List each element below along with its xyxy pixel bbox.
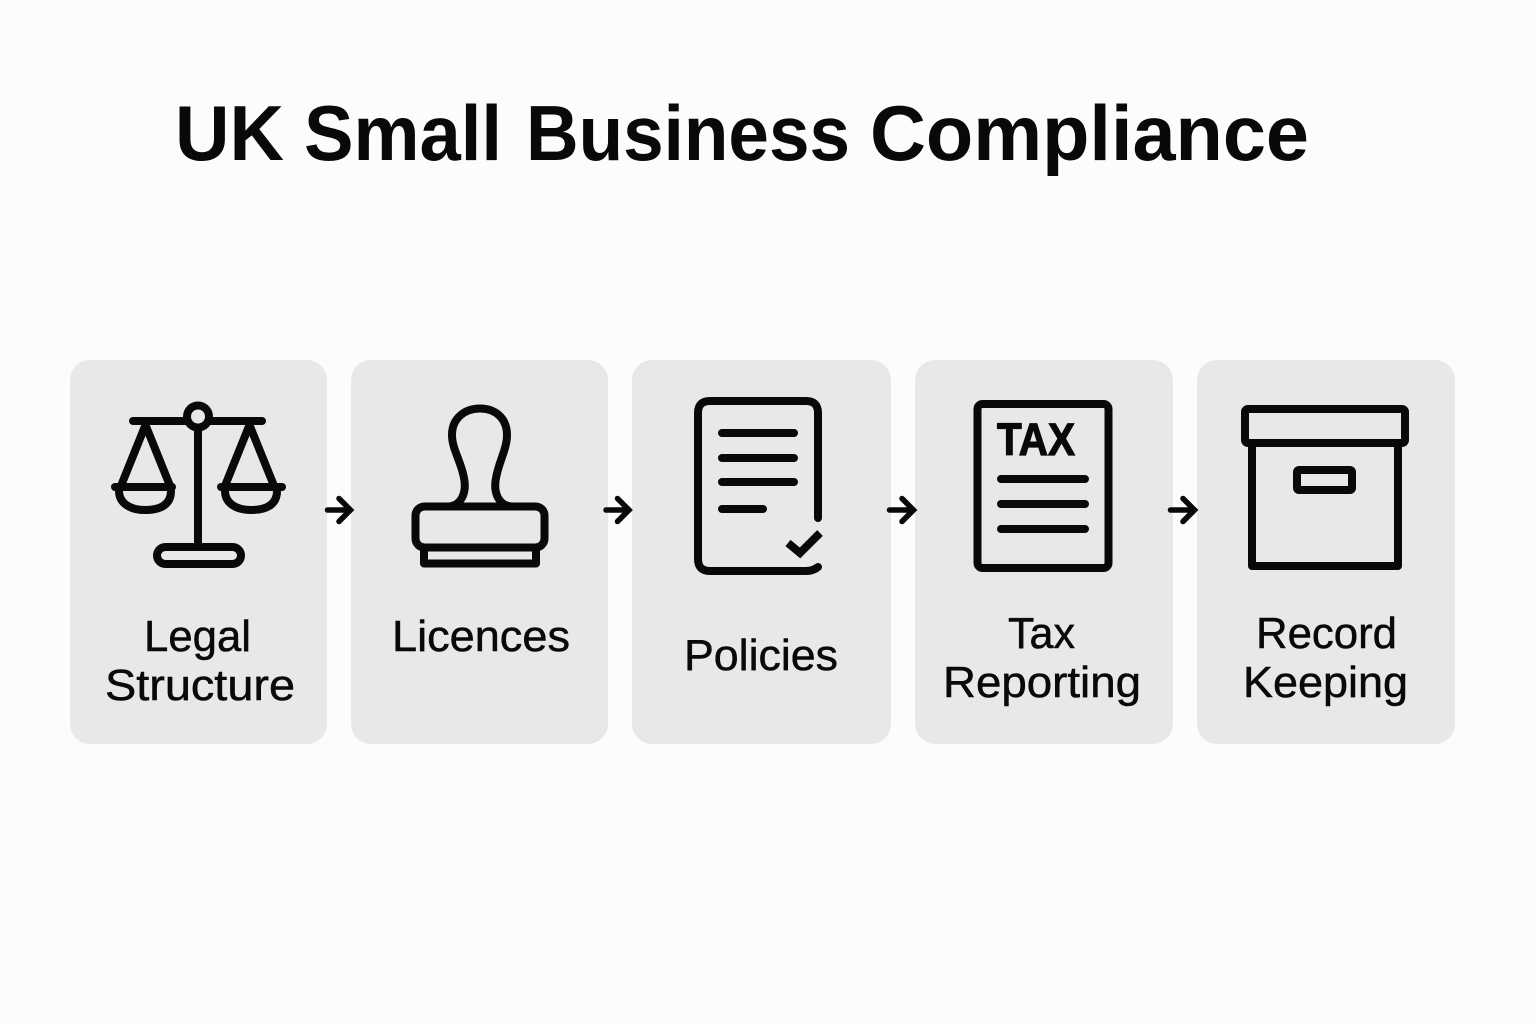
panel: legal structure <box>70 360 327 744</box>
panel: licences <box>351 360 608 744</box>
icon: archive box <box>1245 409 1405 566</box>
panel: policies <box>632 360 891 744</box>
arrow 1 <box>328 498 350 522</box>
title <box>175 89 1309 177</box>
arrow 4 <box>1170 498 1194 522</box>
label: tax reporting <box>943 609 1141 707</box>
label: record keeping <box>1243 609 1408 707</box>
panel: record keeping <box>1197 360 1455 744</box>
label: policies: Policies <box>684 631 838 680</box>
label: legal structure: Legal <box>144 612 251 661</box>
label: legal structure <box>105 612 295 710</box>
icon: rubber stamp <box>416 408 544 564</box>
label: record keeping: Record <box>1256 609 1397 658</box>
icon: balance scales <box>115 406 282 564</box>
label: tax reporting: Reporting <box>943 658 1141 707</box>
label: tax reporting: Tax <box>1008 609 1075 658</box>
label: record keeping: Keeping <box>1243 658 1408 707</box>
label: legal structure: Structure <box>105 661 295 710</box>
icon: tax document: TAX <box>997 414 1075 465</box>
arrow 2 <box>606 498 629 522</box>
panel: tax reporting <box>915 360 1173 744</box>
label: licences: Licences <box>392 612 570 661</box>
title: Business <box>526 89 850 177</box>
icon: policy document with check mark <box>698 401 820 571</box>
title: Small <box>304 89 502 177</box>
arrow 3 <box>890 498 914 522</box>
icon: tax document <box>978 404 1108 568</box>
title: UK <box>175 89 284 177</box>
title: Compliance <box>870 89 1309 177</box>
